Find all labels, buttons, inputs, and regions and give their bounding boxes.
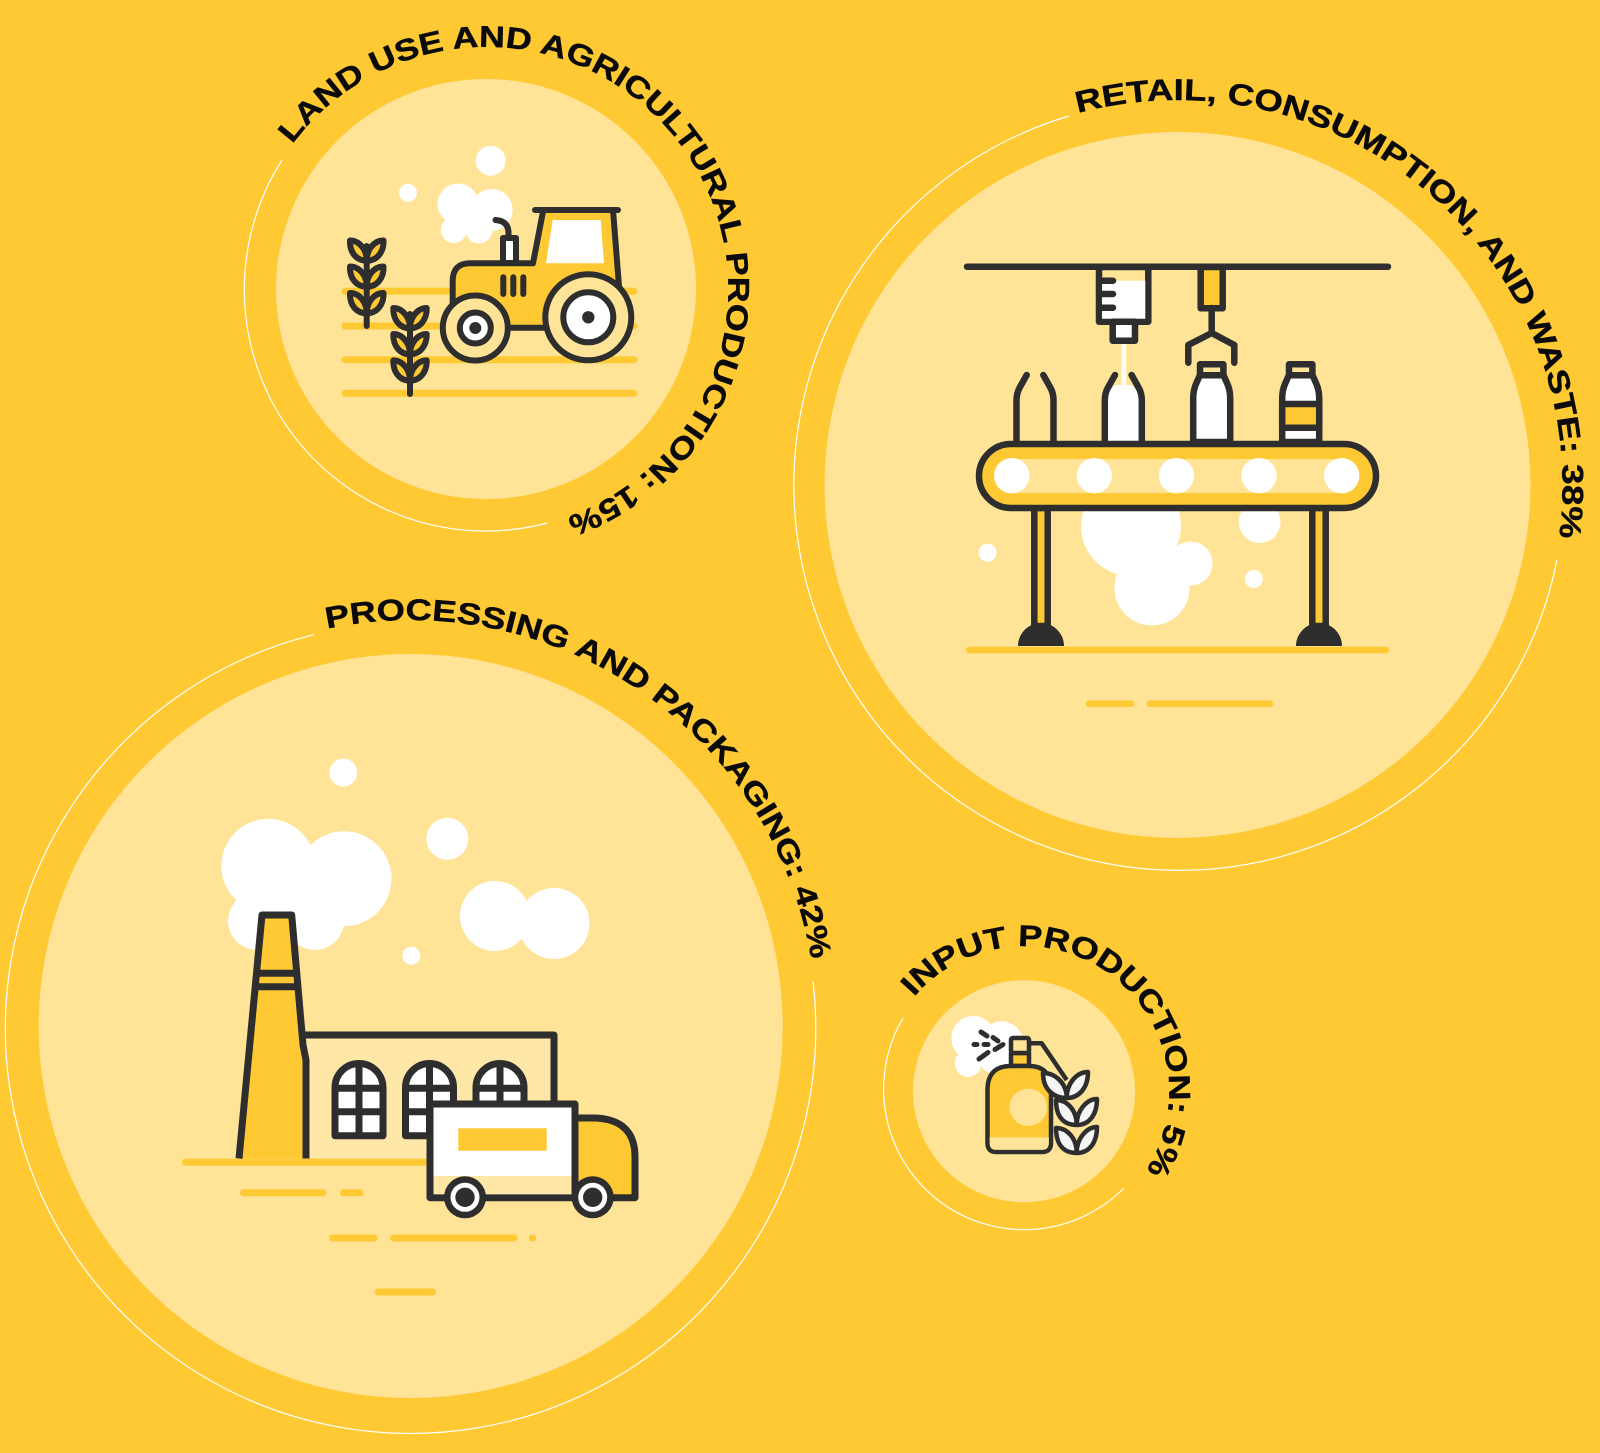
icon: arched window one: [335, 1064, 383, 1136]
panel: land use and agricultural production: [244, 26, 750, 535]
panel: retail, consumption, and waste: [793, 79, 1584, 871]
background circle: [39, 654, 783, 1398]
icon: arched window two: [406, 1064, 454, 1136]
icon: bottles on belt: [1016, 364, 1319, 442]
icon: delivery truck: [430, 1104, 635, 1218]
icon: wheat left: [350, 240, 384, 326]
ring arc: [794, 116, 1557, 870]
icon: factory building: [305, 1035, 554, 1158]
icon: arched window three: [476, 1064, 524, 1136]
icon: leaves: [1043, 1072, 1097, 1153]
background circle: [824, 132, 1530, 838]
icon: wheat right: [393, 308, 427, 394]
icon: tractor: [443, 210, 631, 360]
ring arc: [884, 1018, 1124, 1230]
ground lines: [969, 650, 1386, 704]
icon: chimney: [239, 915, 306, 1158]
background circle: [913, 980, 1135, 1202]
ring arc: [244, 160, 547, 531]
icon: spray dashes: [974, 1032, 1003, 1059]
icon: filling machine: [967, 267, 1388, 386]
heading: RETAIL, CONSUMPTION, AND WASTE: 38%: [1075, 79, 1584, 538]
heading: LAND USE AND AGRICULTURAL PRODUCTION: 15%: [277, 26, 750, 535]
ground lines: [186, 1162, 533, 1292]
field lines: [345, 291, 634, 393]
smoke clouds: [399, 146, 513, 244]
smoke clouds: [221, 759, 590, 965]
heading: PROCESSING AND PACKAGING: 42%: [325, 599, 831, 958]
ring arc: [5, 635, 816, 1433]
spray cloud: [951, 1016, 1023, 1077]
icon: spray bottle: [988, 1038, 1067, 1152]
panel: input production: [883, 925, 1190, 1230]
smoke clouds: [979, 476, 1281, 626]
icon: conveyor belt: [979, 444, 1376, 646]
background circle: [276, 79, 696, 499]
panel: processing and packaging: [4, 599, 831, 1434]
heading: INPUT PRODUCTION: 5%: [900, 925, 1190, 1176]
